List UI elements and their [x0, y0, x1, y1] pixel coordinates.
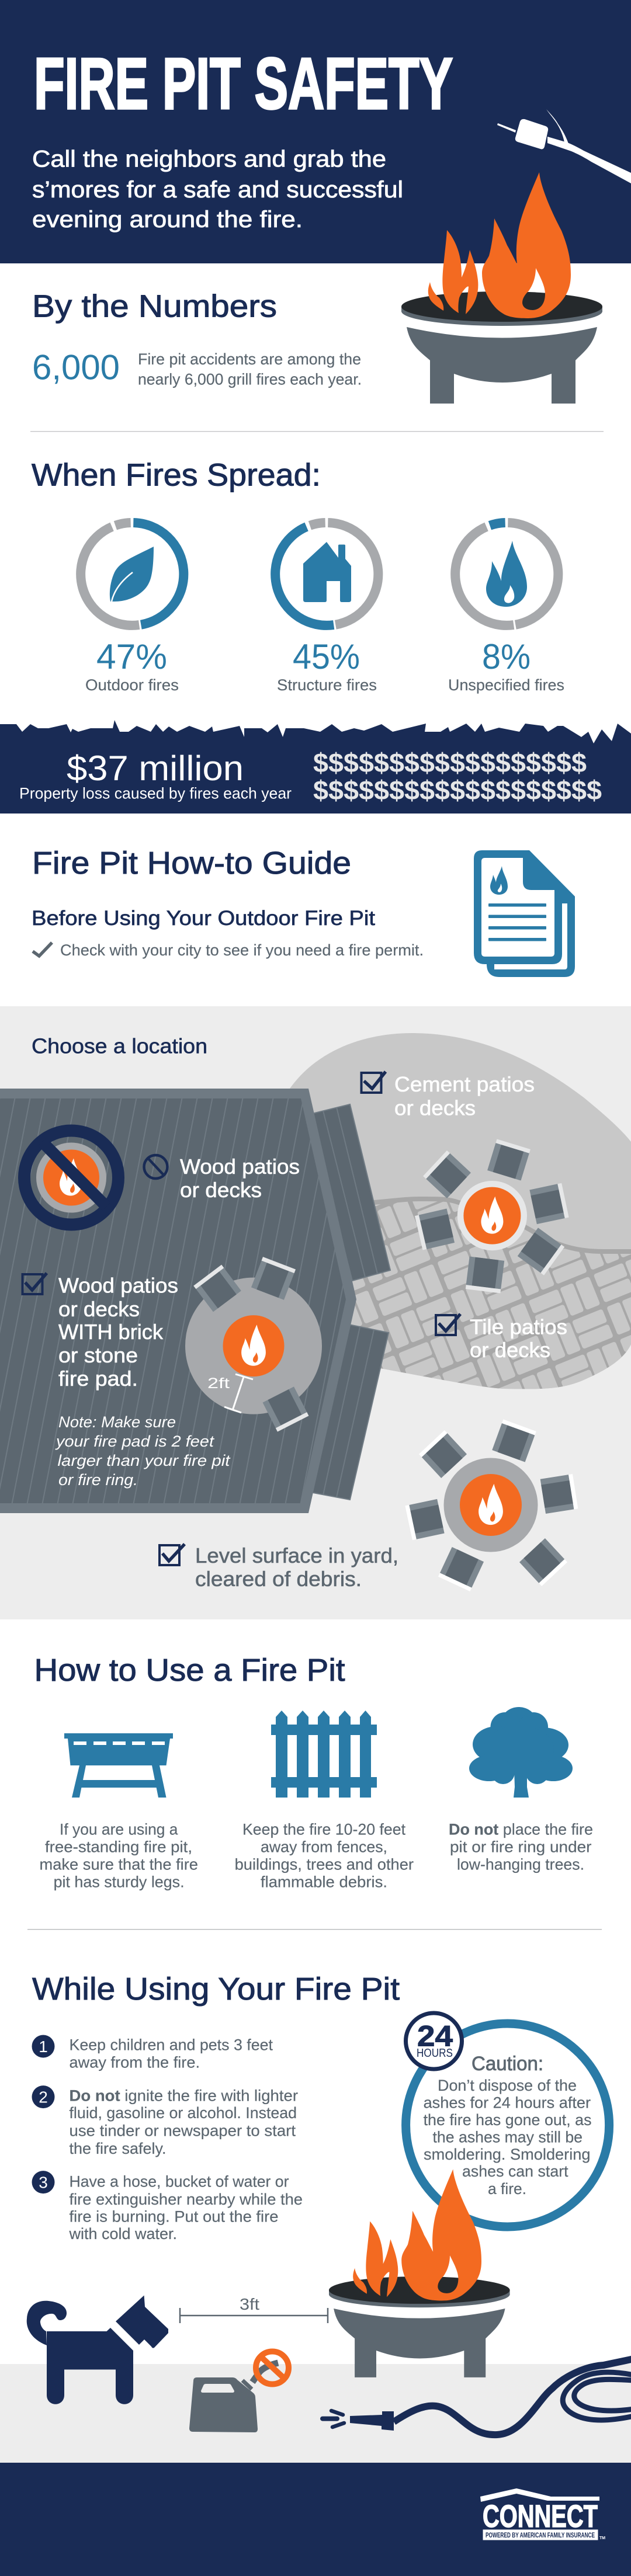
step 1	[32, 2035, 273, 2071]
badge: 24 hours: HOURS	[417, 2047, 453, 2060]
icon: rows of dollar signs	[313, 748, 602, 805]
subtitle text block	[32, 146, 403, 232]
icon: rows of dollar signs: $$$$$$$$$$$$$$$$$$$	[313, 775, 602, 805]
text: caution message	[424, 2053, 591, 2198]
heading: choose a location: Choose a location	[32, 1034, 207, 1058]
panel: choose a location	[0, 1006, 631, 1619]
panel: property loss band with jagged edge	[0, 720, 631, 814]
stat labels: fire percentages: 45%	[293, 637, 360, 676]
step 2: 2	[39, 2088, 48, 2106]
heading: By the Numbers: By the Numbers	[32, 288, 277, 324]
text block: low-hanging trees: Do not place the fire	[449, 1821, 593, 1838]
step 3: with cold water.	[69, 2225, 177, 2243]
text block: keep distance: buildings, trees and other	[235, 1856, 414, 1873]
label: cement patios or decks	[394, 1072, 535, 1120]
logo: Connect	[480, 2488, 605, 2540]
subheading: before using: Before Using Your Outdoor Fire Pit	[32, 907, 375, 930]
label: wood patios or decks	[180, 1155, 300, 1202]
icon: house	[303, 542, 351, 602]
step 3: fire extinguisher nearby while the	[69, 2191, 303, 2208]
step 1: away from the fire.	[69, 2054, 200, 2071]
icon: rows of dollar signs: $$$$$$$$$$$$$$$$$$	[313, 748, 587, 778]
icon: marshmallow on stick	[497, 109, 631, 183]
icon: flame	[486, 541, 527, 607]
brick patio area	[351, 1199, 631, 1389]
text block: low-hanging trees: pit or fire ring under	[450, 1838, 591, 1856]
stat: $37 million	[19, 749, 292, 802]
label: wood patios with fire pad: or decks	[58, 1297, 140, 1321]
label: wood patios with fire pad: Wood patios	[58, 1274, 178, 1298]
text block: sturdy legs: pit has sturdy legs.	[54, 1873, 185, 1891]
text: caution message: Don’t dispose of the	[438, 2077, 577, 2094]
icon: garden hose	[323, 2358, 631, 2435]
icon: tree	[469, 1707, 573, 1798]
text: permit reminder: Check with your city to see if you need a fire permit.	[60, 941, 424, 959]
heading: When Fires Spread: When Fires Spread:	[32, 458, 321, 493]
illustration: yard fire and chairs	[405, 1419, 578, 1591]
text block: grill fires: Fire pit accidents are among the	[138, 350, 361, 368]
label: cement patios or decks: or decks	[394, 1096, 476, 1120]
label: wood patios or decks: or decks	[180, 1178, 262, 1202]
text: caution message: ashes for 24 hours after	[424, 2094, 591, 2112]
measurement: 3 ft	[180, 2295, 328, 2323]
text block: low-hanging trees	[449, 1821, 593, 1873]
panel: header banner	[0, 0, 631, 263]
text: caution message: ashes can start	[462, 2163, 568, 2180]
step 1: 1	[39, 2038, 48, 2056]
stat labels: fire percentages: Structure fires	[277, 676, 377, 694]
label: wood patios with fire pad: fire pad.	[58, 1367, 138, 1390]
callout: caution circle	[405, 2013, 609, 2227]
measurement: 2 ft	[207, 1374, 253, 1413]
icon: check mark	[33, 943, 52, 956]
label: tile patios or decks: Tile patios	[470, 1315, 567, 1339]
stat labels: fire percentages: Outdoor fires	[85, 676, 179, 694]
step 2	[32, 2085, 298, 2157]
chart: structure fires ring 45%	[275, 523, 378, 625]
logo: Connect: TM	[599, 2536, 605, 2540]
step 3	[32, 2171, 303, 2243]
label: wood patios with fire pad: or stone	[58, 1343, 138, 1367]
icon: gas can with no sign	[189, 2351, 289, 2432]
stat: 6,000: 6,000	[32, 348, 120, 387]
chart: outdoor fires ring 47%	[81, 523, 183, 625]
label: wood patios with fire pad	[58, 1274, 178, 1390]
badge: 24 hours: 24	[417, 2019, 453, 2052]
label: level surface	[195, 1543, 398, 1591]
icon: cement checkbox	[361, 1072, 386, 1093]
text: caution message: the fire has gone out, as	[424, 2111, 591, 2129]
icon: small no sign	[144, 1155, 167, 1179]
measurement: 2 ft: 2ft	[207, 1375, 230, 1392]
illustration: fire pad with chairs	[185, 1257, 322, 1432]
wood deck	[0, 1089, 390, 1513]
icon: fire pit with flames, lower	[329, 2169, 510, 2377]
note: fire pad size: Note: Make sure	[58, 1413, 176, 1431]
icon: permit document	[474, 850, 575, 977]
icon: picket fence	[271, 1711, 377, 1798]
note: fire pad size: your fire pad is 2 feet	[55, 1433, 215, 1450]
step 2: Do not ignite the fire with lighter	[69, 2087, 298, 2104]
text block: keep distance: Keep the fire 10-20 feet	[242, 1821, 405, 1838]
text block: keep distance: away from fences,	[261, 1838, 387, 1856]
title: FIRE PIT SAFETY	[34, 44, 453, 124]
footer panel	[0, 2463, 631, 2576]
text block: sturdy legs: If you are using a	[60, 1821, 178, 1838]
text block: sturdy legs: free-standing fire pit,	[45, 1838, 192, 1856]
subtitle text block: Call the neighbors and grab the	[32, 146, 386, 172]
text block: sturdy legs	[40, 1821, 198, 1891]
label: level surface: Level surface in yard,	[195, 1543, 398, 1567]
text: caution message: a fire.	[488, 2180, 526, 2198]
note: fire pad size	[55, 1413, 231, 1489]
icon: grill on legs	[64, 1733, 173, 1798]
cement patio shape	[290, 1033, 631, 1389]
text: caution message: the ashes may still be	[432, 2128, 583, 2146]
stat labels: fire percentages: Unspecified fires	[448, 676, 564, 694]
icon: level surface checkbox	[160, 1544, 185, 1565]
subtitle text block: s’mores for a safe and successful	[32, 177, 403, 203]
text: caution message: Caution:	[471, 2053, 543, 2075]
text block: low-hanging trees: low-hanging trees.	[457, 1856, 584, 1873]
icon: tile checkbox	[436, 1314, 460, 1335]
note: fire pad size: larger than your fire pit	[57, 1452, 231, 1469]
stat: $37 million: Property loss caused by fires each year	[19, 785, 292, 802]
text block: grill fires: nearly 6,000 grill fires each year.	[138, 371, 362, 388]
step 2: fluid, gasoline or alcohol. Instead	[69, 2104, 297, 2122]
label: tile patios or decks: or decks	[470, 1338, 550, 1362]
badge: 24 hours	[405, 2013, 462, 2069]
label: cement patios or decks: Cement patios	[394, 1072, 535, 1096]
label: wood patios with fire pad: WITH brick	[58, 1320, 164, 1344]
icon: dog	[27, 2295, 168, 2404]
stat labels: fire percentages: 47%	[96, 637, 167, 676]
heading: Fire Pit How-to Guide: Fire Pit How-to Guide	[32, 846, 351, 881]
step 3: fire is burning. Put out the fire	[69, 2207, 278, 2225]
step 1: Keep children and pets 3 feet	[69, 2036, 273, 2054]
measurement: 3 ft: 3ft	[240, 2295, 259, 2313]
label: wood patios or decks: Wood patios	[180, 1155, 300, 1179]
icon: fire pit with flames	[401, 172, 602, 404]
icon: fire pad checkbox	[22, 1273, 47, 1294]
icon: no fire sign on wood deck	[25, 1131, 118, 1225]
text block: keep distance: flammable debris.	[261, 1873, 387, 1891]
subtitle text block: evening around the fire.	[32, 207, 303, 232]
heading: How to Use a Fire Pit: How to Use a Fire Pit	[34, 1653, 345, 1688]
step 3: 3	[39, 2174, 48, 2192]
stat labels: fire percentages	[85, 637, 564, 694]
chart: unspecified fires ring 8%	[455, 523, 558, 625]
text block: sturdy legs: make sure that the fire	[40, 1856, 198, 1873]
text block: keep distance	[235, 1821, 414, 1891]
step 2: the fire safely.	[69, 2140, 166, 2157]
text block: grill fires	[138, 350, 362, 388]
stat labels: fire percentages: 8%	[482, 637, 531, 676]
note: fire pad size: or fire ring.	[58, 1471, 138, 1489]
label: tile patios or decks	[470, 1315, 567, 1362]
step 2: use tinder or newspaper to start	[69, 2122, 296, 2140]
step 3: Have a hose, bucket of water or	[69, 2172, 289, 2190]
stat: $37 million: $37 million	[67, 749, 244, 788]
label: level surface: cleared of debris.	[195, 1567, 362, 1591]
text: caution message: smoldering. Smoldering	[424, 2146, 590, 2163]
heading: While Using Your Fire Pit: While Using Your Fire Pit	[32, 1972, 400, 2007]
illustration: cement patio fire and chairs	[415, 1139, 569, 1293]
icon: leaf	[110, 547, 154, 602]
ground band	[0, 2364, 631, 2463]
